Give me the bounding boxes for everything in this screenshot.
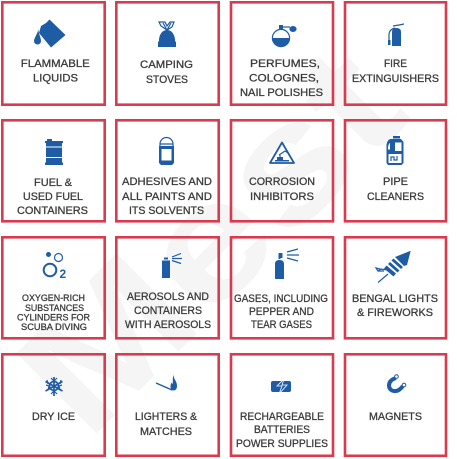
label: WITH AEROSOLS: [125, 319, 211, 331]
icon: battery: [271, 379, 291, 394]
icon: barrel: [45, 139, 63, 165]
label: INHIBITORS: [250, 191, 314, 203]
card: dry ice: [2, 354, 105, 456]
label: CONTAINERS: [134, 305, 202, 317]
label: BENGAL LIGHTS: [352, 293, 438, 305]
label: STOVES: [146, 74, 188, 86]
label: CORROSION: [249, 176, 315, 188]
label: FUEL &: [34, 177, 73, 189]
card: magnets: [345, 354, 446, 456]
icon: corrosion triangle: [270, 142, 294, 163]
icon: jug and drop: [34, 20, 66, 48]
label: ALL PAINTS AND: [122, 191, 212, 203]
label: PIPE: [383, 176, 408, 188]
icon: stove: [158, 22, 176, 47]
label: CAMPING: [140, 59, 193, 71]
card: fire extinguishers: [345, 2, 446, 105]
label: PERFUMES,: [250, 58, 320, 70]
card: rechargeable batteries: [231, 354, 333, 456]
card: fuel containers: [2, 120, 105, 221]
label: & FIREWORKS: [357, 307, 433, 319]
label: ITS SOLVENTS: [129, 205, 204, 217]
label: TEAR GASES: [251, 319, 312, 331]
card: perfumes: [231, 2, 333, 105]
icon: aerosol can: [162, 254, 182, 278]
icon: O2 bubbles: 2: [60, 267, 66, 281]
label: [352, 293, 438, 319]
label: GASES, INCLUDING: [234, 293, 328, 305]
card: flammable liquids: [2, 2, 105, 105]
label: AEROSOLS AND: [127, 291, 209, 303]
card: oxygen-rich substances: [2, 237, 105, 338]
label: CLEANERS: [367, 191, 424, 203]
card: aerosols: [116, 237, 219, 338]
label: CONTAINERS: [17, 205, 88, 217]
card: lighters and matches: [116, 354, 219, 456]
label: [367, 176, 424, 203]
label: [234, 293, 328, 331]
label: BATTERIES: [254, 424, 310, 436]
card: pipe cleaners: [345, 120, 446, 221]
label: CYLINDERS FOR: [17, 312, 90, 324]
label: FLAMMABLE: [21, 58, 90, 70]
label: [17, 177, 88, 217]
label: RECHARGEABLE: [240, 411, 324, 423]
label: [140, 59, 193, 86]
label: [122, 176, 212, 217]
label: POWER SUPPLIES: [236, 438, 328, 450]
label: ADHESIVES AND: [122, 176, 212, 188]
label: SCUBA DIVING: [21, 322, 87, 333]
icon: snowflake: [46, 377, 62, 396]
label: [17, 293, 90, 333]
label: COLOGNES,: [249, 72, 319, 84]
label: PEPPER AND: [249, 306, 314, 318]
label: SUBSTANCES: [25, 303, 84, 314]
label: [352, 58, 439, 85]
label: NAIL POLISHES: [240, 87, 323, 99]
icon: paint bucket: [159, 138, 174, 165]
label: MAGNETS: [369, 411, 422, 423]
label: OXYGEN-RICH: [22, 293, 85, 304]
label: [135, 411, 198, 438]
icon: extinguisher: [388, 24, 404, 46]
label: [236, 411, 328, 450]
card: gases: [231, 237, 333, 338]
label: EXTINGUISHERS: [352, 73, 439, 85]
label: [240, 58, 323, 99]
label: LIQUIDS: [33, 72, 78, 84]
card: camping stoves: [116, 2, 219, 105]
icon: perfume bottle: [272, 25, 297, 47]
label: [125, 291, 211, 331]
card: bengal lights: [345, 237, 446, 338]
card: corrosion inhibitors: [231, 120, 333, 221]
label: LIGHTERS &: [135, 411, 198, 423]
icon: firework rocket: [376, 251, 411, 282]
label: USED FUEL: [23, 191, 83, 203]
label: FIRE: [384, 58, 407, 70]
label: [21, 58, 90, 84]
label: MATCHES: [140, 426, 192, 438]
icon: gas canister: [275, 249, 299, 279]
label: DRY ICE: [32, 411, 75, 423]
label: [249, 176, 315, 203]
icon: magnet: [389, 375, 406, 391]
icon: match: [156, 375, 177, 390]
card: adhesives and paints: [116, 120, 219, 221]
icon: bottle: [386, 136, 404, 165]
